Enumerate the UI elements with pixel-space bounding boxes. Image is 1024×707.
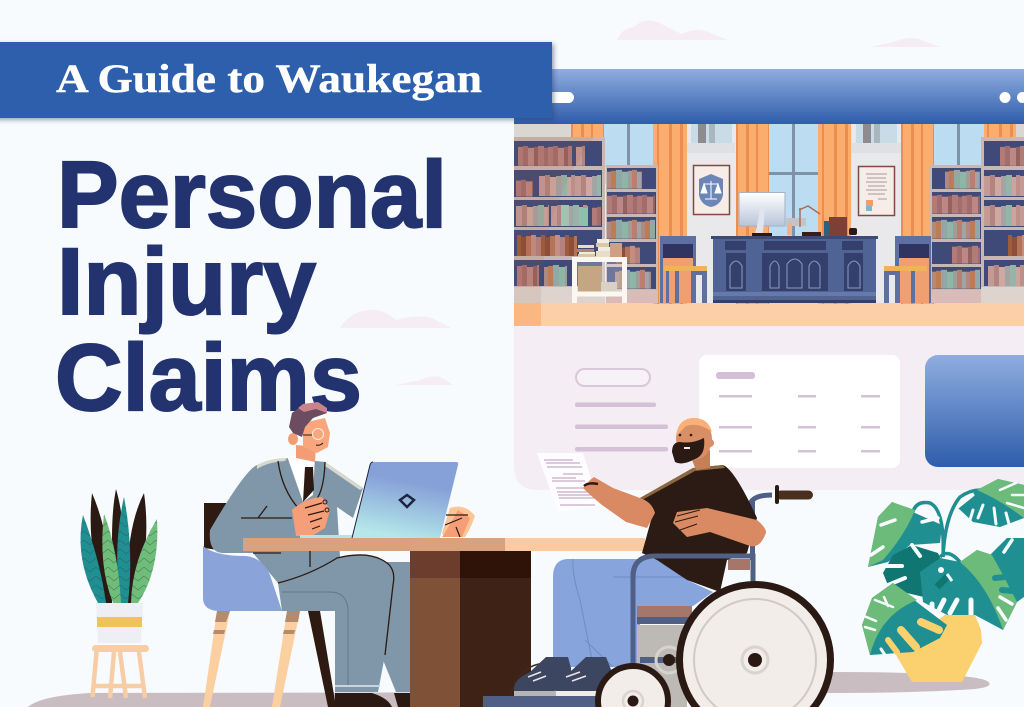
conference table <box>243 538 645 707</box>
pill outline <box>576 369 650 386</box>
framed scales shield <box>694 166 730 214</box>
stems <box>912 490 980 562</box>
wall <box>514 124 1024 304</box>
resting arm <box>673 508 766 546</box>
reaching arm <box>583 477 655 528</box>
neck <box>296 445 316 462</box>
big right leaf <box>920 538 1024 630</box>
translucent curtain tint <box>514 137 594 303</box>
far hand <box>442 507 475 537</box>
office desk <box>711 236 878 303</box>
upper left leaf <box>868 502 942 567</box>
lapels <box>241 461 325 567</box>
heading: personal injury claims: Personal <box>57 142 447 248</box>
left chair <box>660 236 707 303</box>
right chair <box>884 236 931 303</box>
push handle <box>775 485 813 504</box>
small wheel <box>598 666 668 707</box>
browser top bar <box>514 69 1024 124</box>
pot <box>893 615 982 682</box>
wheelchair frame <box>633 495 772 707</box>
neck <box>690 450 710 470</box>
curtains <box>571 124 1016 304</box>
heading: personal injury claims: Injury <box>57 229 316 335</box>
shoulder highlight <box>257 458 363 490</box>
pot <box>96 603 143 643</box>
attorney chair back legs <box>203 503 336 707</box>
decorative clouds <box>340 21 941 385</box>
attorney chair seat <box>203 546 282 611</box>
text lines <box>575 402 668 452</box>
book cart <box>574 239 624 303</box>
footrest arc <box>510 663 545 698</box>
footrest <box>483 696 603 707</box>
title banner: A Guide to Waukegan <box>56 56 482 101</box>
left potted plant <box>81 489 157 698</box>
floor shadows <box>28 672 990 707</box>
title banner <box>0 42 552 118</box>
upper window blinds <box>687 124 901 153</box>
held document <box>537 453 600 512</box>
laptop <box>300 462 458 539</box>
leaves <box>81 489 157 603</box>
lower left leaf <box>862 583 947 655</box>
white table card <box>699 355 900 468</box>
suit torso and arm <box>210 458 363 583</box>
head <box>672 418 714 463</box>
heading: personal injury claims: Claims <box>55 325 362 431</box>
heading: personal injury claims <box>55 142 447 431</box>
desk items <box>739 192 857 236</box>
shoes <box>335 693 410 707</box>
right bookcases <box>930 137 1024 303</box>
dark middle leaf <box>882 545 942 598</box>
attorney in grey suit <box>210 402 475 707</box>
browser window lower panel <box>514 320 1024 490</box>
shirt and tie <box>287 456 315 502</box>
pants <box>553 559 713 667</box>
blue panel <box>925 355 1024 467</box>
top right leaf <box>957 479 1024 527</box>
windows <box>604 124 984 236</box>
hand on chest <box>292 497 330 536</box>
large wheel <box>680 584 830 707</box>
head <box>288 402 330 453</box>
stool <box>92 645 149 698</box>
torso <box>640 465 757 592</box>
legs <box>278 555 394 692</box>
shoes <box>514 657 616 696</box>
floor <box>514 303 1024 326</box>
monstera plant <box>862 479 1024 682</box>
law office scene <box>514 124 1024 326</box>
framed certificate <box>858 166 894 216</box>
back leg <box>383 562 410 692</box>
armrest bar <box>633 556 753 600</box>
left bookcases <box>514 137 658 303</box>
client in wheelchair <box>483 418 830 707</box>
